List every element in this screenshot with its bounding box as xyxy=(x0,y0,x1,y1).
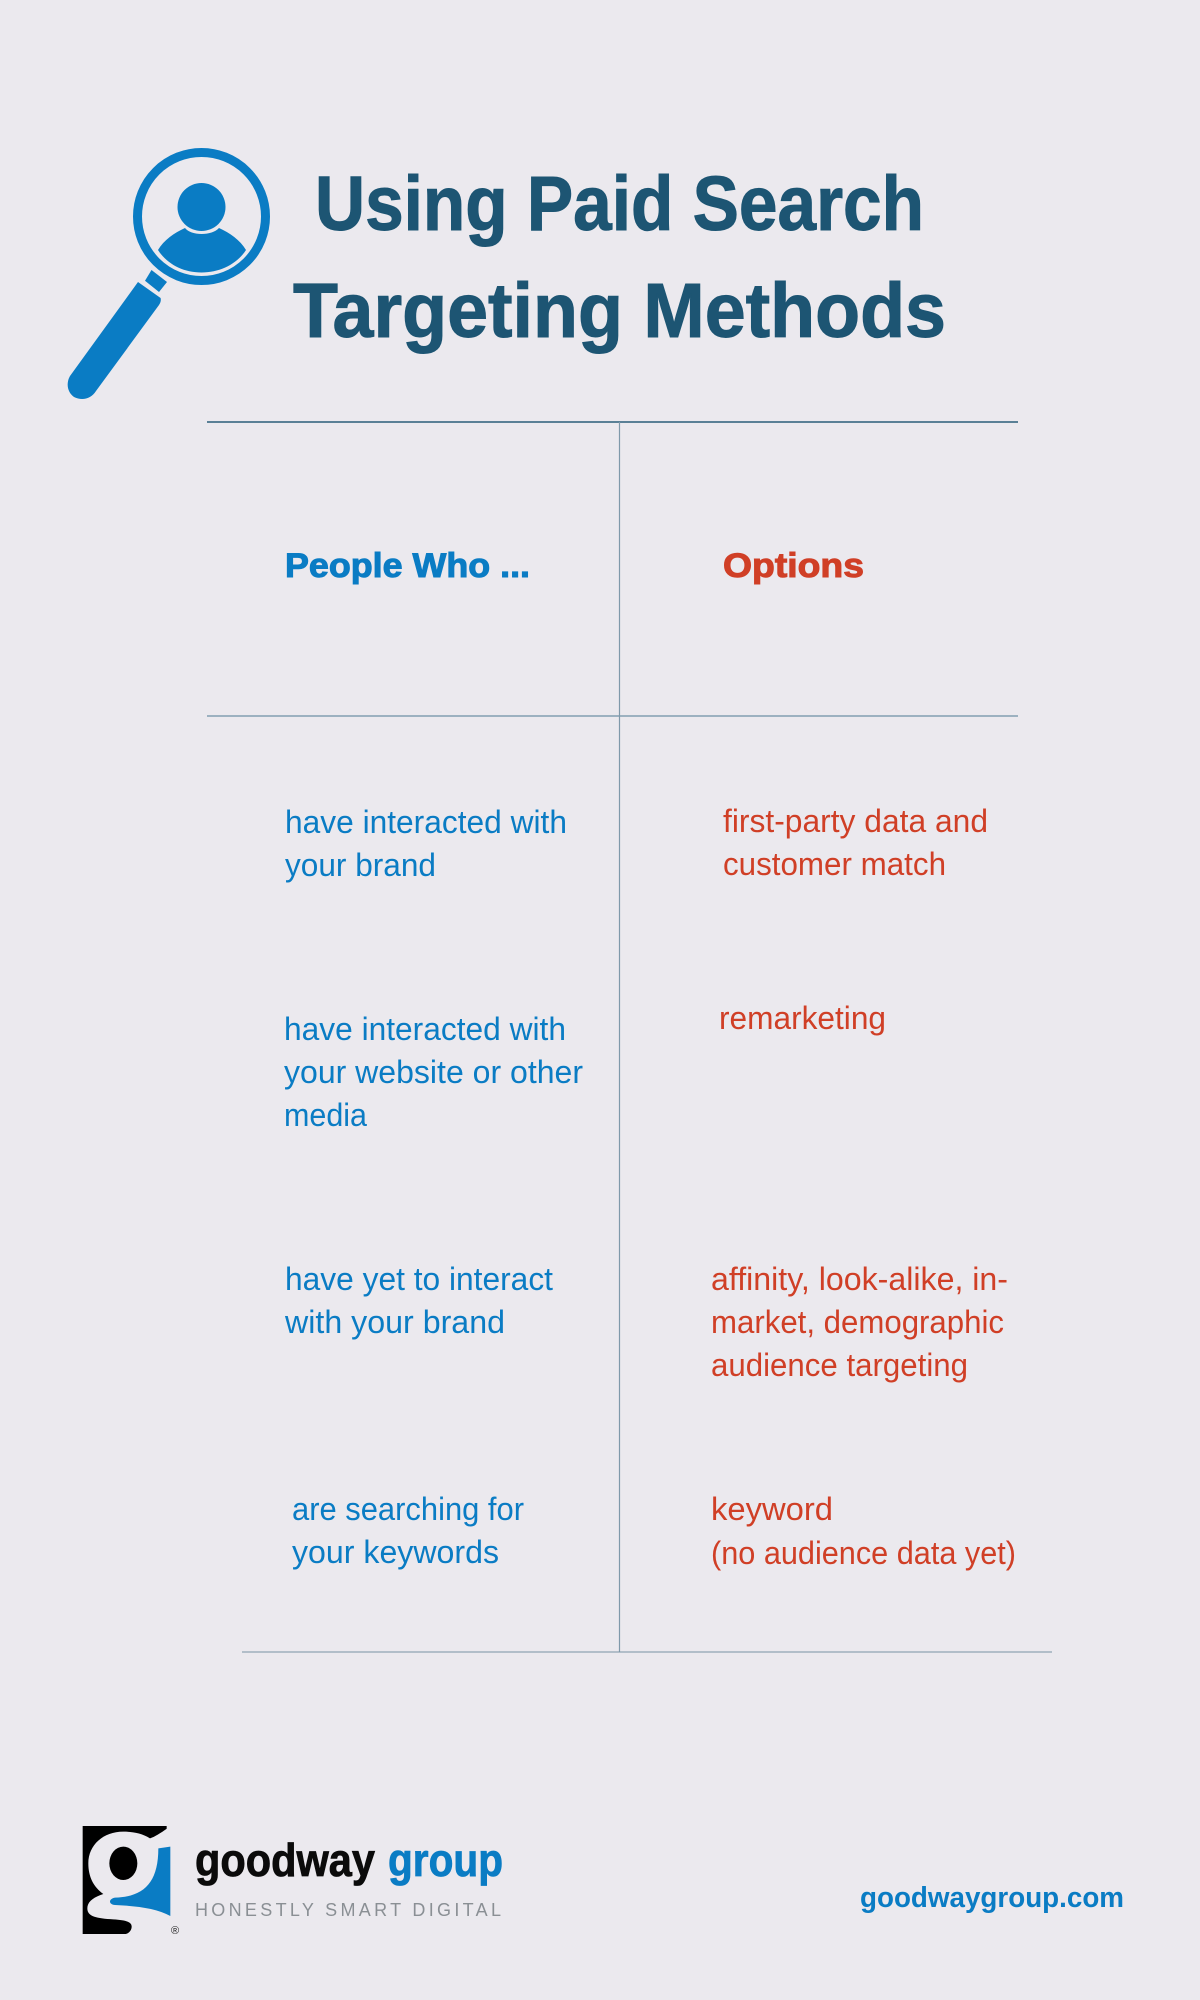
row 4 people: are searching for xyxy=(292,1491,524,1527)
row 2 people: media xyxy=(284,1097,367,1133)
registered mark: ® xyxy=(171,1925,179,1937)
row 3 people: have yet to interact xyxy=(285,1261,553,1297)
website url: goodwaygroup.com xyxy=(860,1882,1124,1914)
logo: goodway group xyxy=(83,1823,503,1937)
row 3 people xyxy=(284,1261,553,1340)
row 3 option: market, demographic xyxy=(711,1304,1004,1340)
row 1 people xyxy=(285,804,567,883)
title xyxy=(293,161,946,354)
row 4 people xyxy=(292,1491,524,1570)
row 4 option: keyword xyxy=(711,1491,833,1527)
column heading: options: Options xyxy=(723,547,864,585)
row 2 people: have interacted with xyxy=(284,1011,566,1047)
row 1 option: customer match xyxy=(723,846,946,882)
row 3 option: audience targeting xyxy=(711,1347,968,1383)
row 3 people: with your brand xyxy=(284,1304,505,1340)
icon: magnifying glass with person xyxy=(68,152,266,399)
row 2 option: remarketing xyxy=(719,1000,886,1036)
title: Using Paid Search xyxy=(315,161,924,247)
row 4 option: (no audience data yet) xyxy=(711,1535,1016,1571)
table: targeting methods xyxy=(207,422,1052,1652)
icon: g mark xyxy=(83,1823,175,1934)
logo: goodway group: group xyxy=(388,1834,503,1886)
row 3 option: affinity, look-alike, in- xyxy=(711,1261,1008,1297)
row 4 option xyxy=(711,1491,1016,1571)
column heading: people who: People Who ... xyxy=(285,547,530,585)
row 2 people xyxy=(284,1011,583,1133)
row 1 people: have interacted with xyxy=(285,804,567,840)
wordmark: goodway xyxy=(195,1834,375,1886)
row 1 option xyxy=(723,803,988,882)
row 3 option xyxy=(711,1261,1008,1383)
row 1 people: your brand xyxy=(285,847,436,883)
title: Targeting Methods xyxy=(293,268,946,354)
row 2 people: your website or other xyxy=(284,1054,583,1090)
row 4 people: your keywords xyxy=(292,1534,499,1570)
row 1 option: first-party data and xyxy=(723,803,988,839)
tagline: HONESTLY SMART DIGITAL xyxy=(195,1900,501,1920)
